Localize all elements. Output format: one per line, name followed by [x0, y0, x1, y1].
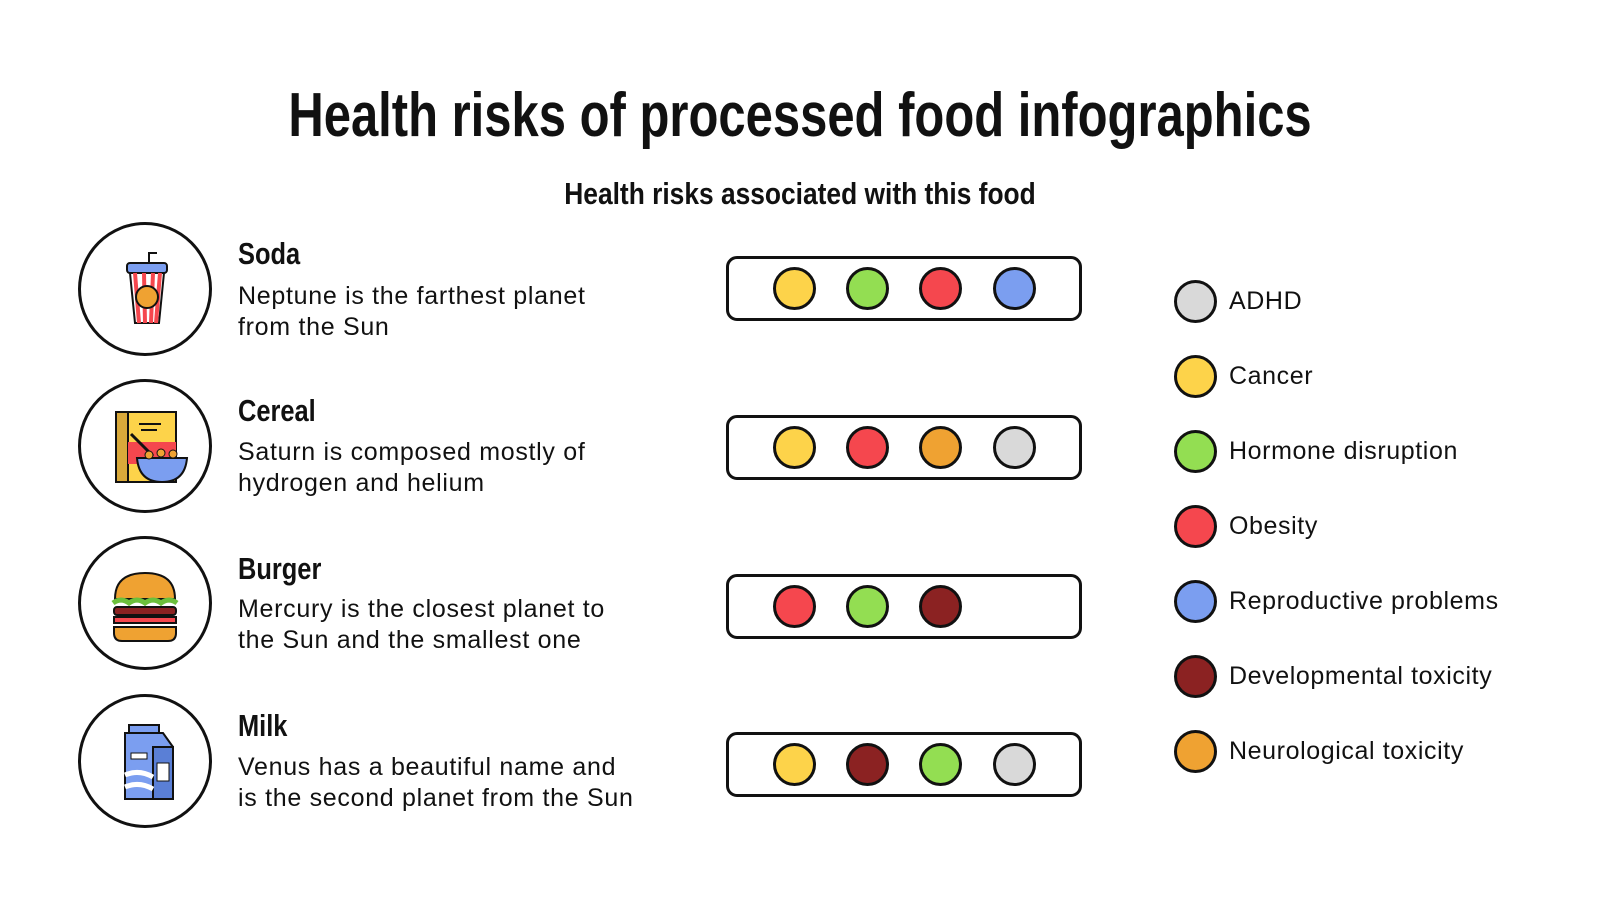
- row: soda: [78, 222, 212, 356]
- bar: soda risks: [726, 256, 1082, 321]
- text: from the Sun: [238, 313, 390, 341]
- text: burger: [238, 551, 605, 654]
- row: burger: [78, 536, 212, 670]
- bar: cereal risks: [726, 415, 1082, 480]
- text: is the second planet from the Sun: [238, 784, 634, 812]
- legend: Reproductive problems: [1229, 587, 1499, 615]
- legend: Obesity: [1229, 512, 1318, 540]
- row: milk: [78, 694, 212, 828]
- text: soda: [238, 236, 586, 341]
- legend: Hormone disruption: [1229, 437, 1458, 465]
- icon: cereal: [78, 379, 212, 513]
- row: cereal: [78, 379, 212, 513]
- icon: milk: [78, 694, 212, 828]
- legend: Developmental toxicity: [1229, 662, 1492, 690]
- legend: ADHD: [1229, 287, 1302, 315]
- text: Soda: [238, 236, 300, 271]
- text: milk: [238, 708, 634, 812]
- text: Cereal: [238, 393, 316, 428]
- subtitle: Health risks associated with this food: [564, 176, 1036, 211]
- text: Milk: [238, 708, 287, 743]
- text: Neptune is the farthest planet: [238, 282, 586, 310]
- text: Burger: [238, 551, 321, 586]
- bar: milk risks: [726, 732, 1082, 797]
- legend: Neurological toxicity: [1229, 737, 1464, 765]
- text: the Sun and the smallest one: [238, 626, 581, 654]
- title: Health risks of processed food infographics: [288, 81, 1312, 150]
- text: hydrogen and helium: [238, 469, 485, 497]
- legend: Cancer: [1229, 362, 1313, 390]
- text: Saturn is composed mostly of: [238, 438, 586, 466]
- bar: burger risks: [726, 574, 1082, 639]
- text: cereal: [238, 393, 586, 497]
- icon: burger: [78, 536, 212, 670]
- text: Mercury is the closest planet to: [238, 595, 605, 623]
- icon: soda: [78, 222, 212, 356]
- legend: [1174, 280, 1499, 773]
- text: Venus has a beautiful name and: [238, 753, 616, 781]
